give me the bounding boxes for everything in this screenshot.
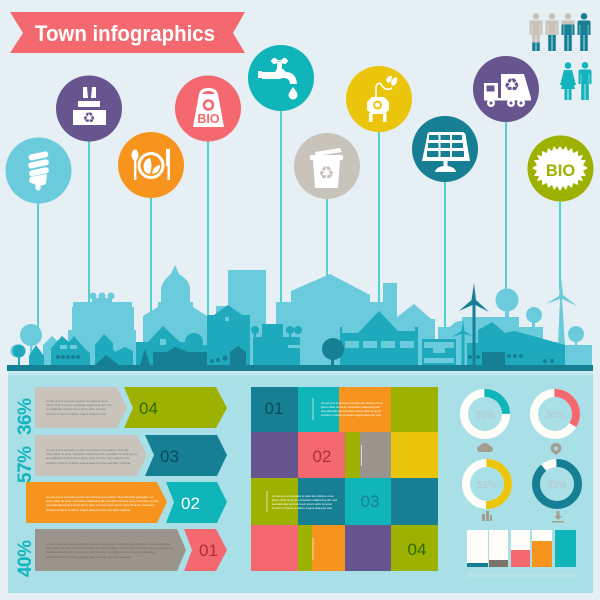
grid text — [272, 401, 383, 510]
grid text: ipsum dolor sit amet, consetetur sadipscing elitr, sed — [272, 498, 337, 502]
percentage labels: 36% — [15, 398, 36, 435]
arrow row 01: invidunt ut labore et dolore magna aliquyam erat, sed diam voluptua — [46, 555, 131, 559]
title banner — [10, 12, 245, 53]
grid numbers — [265, 399, 426, 559]
arrow row 01 — [35, 529, 227, 571]
arrow row 02: invidunt ut labore et dolore magna aliquyam erat, sed diam voluptua — [46, 508, 131, 512]
arrow row 01: sea takimata sanctus lorem ipsum dolor sit amet, lorem ipsum dolor sit amet, consetetur — [46, 550, 155, 554]
icon: bar glyph — [482, 511, 492, 521]
town skyline: back layer — [10, 265, 592, 365]
arrow row 04: 04 — [139, 399, 158, 418]
grid numbers: 04 — [408, 540, 426, 559]
icon circle: recycling bin — [294, 133, 360, 199]
grid text: sea takimata sanctus lorem ipsum dolor sit amet — [272, 502, 332, 506]
icon circle: solar panel — [412, 116, 478, 182]
icon circle: recycling factory: ♻ — [83, 110, 95, 126]
arrow row 03: sea takimata sanctus lorem ipsum dolor sit amet, lorem ipsum dolor — [46, 456, 130, 460]
donut chart 93% — [536, 463, 578, 505]
grid text: At vero eos et accusam et justo duo dolores et ea — [321, 401, 383, 405]
icon circle: bio plug — [346, 66, 412, 132]
people icons: proportion — [530, 13, 590, 51]
grid text: At vero eos et accusam et justo duo dolores et ea — [272, 494, 334, 498]
arrow row 03: invidunt ut labore et dolore magna aliquyam erat, sed diam voluptua — [46, 461, 131, 465]
arrow row 03 — [35, 435, 227, 476]
info panel background — [8, 371, 593, 593]
donut chart 25% — [464, 393, 506, 435]
donut chart 25%: 25% — [475, 410, 495, 421]
grid text: invidunt ut labore et dolore magna aliquyam erat — [321, 413, 381, 417]
arrow row 03: 03 — [160, 447, 179, 466]
percentage labels: 40% — [15, 540, 36, 577]
icon: map pin — [550, 443, 562, 455]
arrow row 02: sea takimata sanctus lorem ipsum dolor sit amet, lorem ipsum dolor sit amet, consetetur — [46, 503, 155, 507]
icon circle: bio badge: BIO — [546, 162, 575, 180]
arrow row 01: At vero eos et accusam et justo duo dolores et ea rebum. Stet clita kasd gubergren, no sea takimata — [46, 542, 170, 546]
donut chart 34% — [534, 393, 576, 435]
location poles — [38, 100, 560, 330]
grid text: ipsum dolor sit amet, consetetur sadipscing elitr, — [321, 405, 381, 409]
title banner: Town infographics — [35, 21, 215, 46]
icon circle: recycling truck — [473, 56, 539, 122]
arrow row 02 — [26, 482, 227, 523]
grid numbers: 03 — [361, 492, 379, 511]
wind turbine — [459, 283, 489, 365]
donut chart 93%: 93% — [547, 480, 567, 491]
town skyline: front layer — [7, 338, 593, 371]
grid text: invidunt ut labore et dolore magna aliquyam erat — [272, 506, 332, 510]
percentage labels: 57% — [15, 446, 36, 483]
icon circle: recycling factory — [56, 76, 122, 142]
town skyline: middle layer — [12, 305, 565, 365]
icon circle: water tap — [248, 45, 314, 111]
arrow row 02: At vero eos et accusam et justo duo dolores et ea rebum. Stet clita kasd gubergren, no — [46, 495, 154, 499]
arrow row 04: invidunt ut labore et dolore magna aliquyam erat — [46, 412, 106, 416]
icon circle: bio bag: BIO — [197, 112, 220, 126]
grid divider bars — [266, 398, 362, 560]
donut chart 34%: 34% — [545, 410, 565, 421]
arrow row 01: ipsum dolor sit amet, consetetur sadipscing elitr, sed diam sit amet eos et accusam et justo duo dolores — [46, 546, 174, 550]
percentage labels — [15, 398, 36, 577]
arrow row 01: 01 — [199, 541, 218, 560]
arrow row 04: sea takimata sanctus lorem ipsum dolor sit amet, — [46, 407, 107, 411]
icon circle: recycling bin: ♻ — [318, 163, 335, 184]
arrow row 02: 02 — [181, 494, 200, 513]
donut chart 51% — [466, 463, 508, 505]
icon circle: bio bag — [175, 76, 241, 142]
grid numbers: 01 — [265, 399, 283, 418]
stacked bar chart — [467, 530, 576, 578]
people icons: woman and man — [560, 62, 592, 100]
arrow row 04: rebum dolor sit amet, consetetur sadipscing elitr, sed — [46, 403, 112, 407]
building windows — [60, 317, 454, 363]
grid text: sea takimata sanctus lorem ipsum dolor sit amet — [321, 409, 381, 413]
shadow band under town — [8, 371, 593, 377]
arrow row 03: At vero eos et accusam et justo duo dolores et ea rebum. Stet clita — [46, 448, 129, 452]
icon: download — [552, 511, 564, 522]
arrow row 03: ipsum dolor sit amet, consetetur sadipscing elitr, sed diam sit amet eos et — [46, 452, 137, 456]
colour block grid — [251, 387, 438, 571]
arrow row 02: ipsum dolor sit amet, consetetur sadipscing elitr, sed diam sit amet eos et accusam et justo — [46, 499, 159, 503]
arrow row 04 — [35, 387, 227, 428]
icon circle: light bulb — [6, 138, 72, 204]
icon: cloud — [477, 443, 493, 452]
icon circle: bio badge — [528, 136, 594, 202]
icon circle: recycling truck: ♻ — [504, 75, 520, 96]
icon circle: plate with leaves — [118, 132, 184, 198]
donut chart 51%: 51% — [477, 480, 497, 491]
arrow row 04: At vero eos et accusam et justo duo dolores et ea — [46, 399, 108, 403]
grid numbers: 02 — [313, 447, 331, 466]
